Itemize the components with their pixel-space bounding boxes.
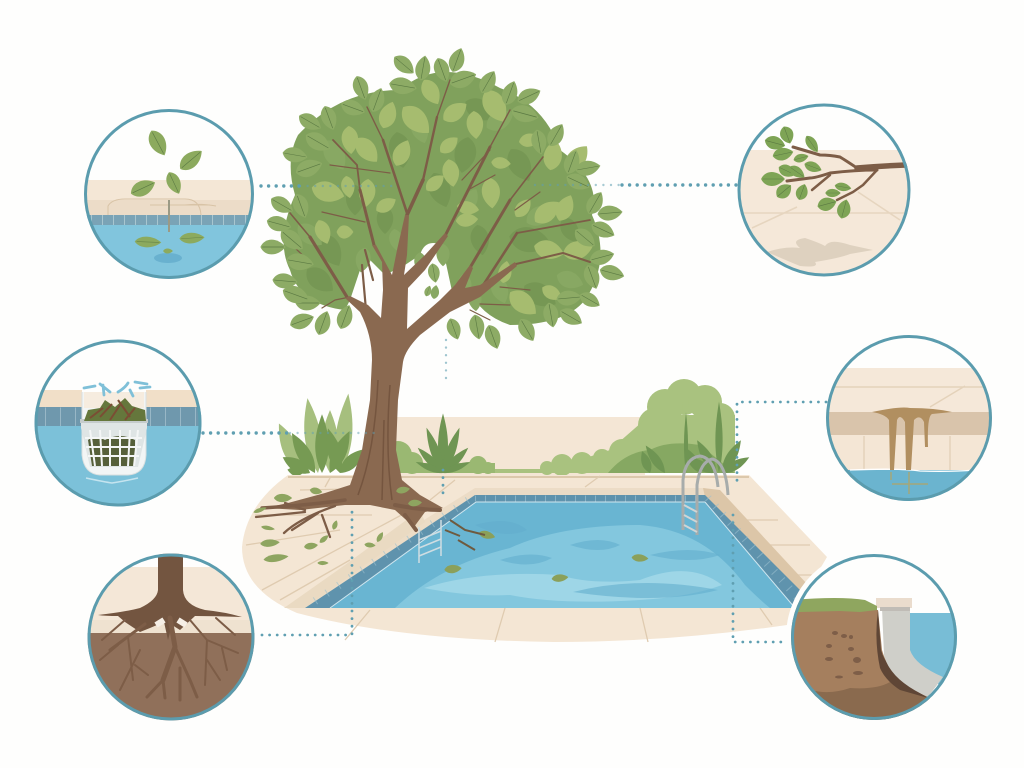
fallen leaves on deck [253, 486, 422, 565]
tree trunk and roots [98, 550, 242, 640]
tree [256, 46, 626, 537]
water [910, 613, 957, 686]
debris pile [84, 398, 146, 421]
garden shrubs [272, 379, 752, 478]
canopy highlight leaves [309, 76, 595, 321]
pool deck [242, 475, 827, 642]
swimming pool [305, 456, 803, 608]
concrete pool wall [882, 608, 943, 697]
canopy mid leaves [292, 104, 586, 312]
detail circle: skimmer basket clogged with debris [30, 340, 210, 511]
floating leaves [444, 529, 649, 583]
canopy shaded leaves [301, 93, 584, 313]
branch [787, 147, 906, 200]
water highlights [395, 525, 770, 608]
detail circle: invasive roots [85, 550, 260, 723]
stain drips [872, 408, 952, 470]
connector lines [203, 185, 826, 642]
coping [876, 598, 912, 608]
back garden wall [385, 417, 645, 475]
pool ladder right [683, 456, 728, 535]
tile band [305, 495, 803, 608]
detail circle: leaves falling into pool [80, 109, 260, 285]
trunk and main limbs [265, 215, 517, 527]
detail circle: soil and pool wall section [790, 554, 960, 730]
water [330, 502, 795, 608]
pool ladder left [419, 520, 441, 563]
detail circle: rust stain on coping [825, 335, 995, 504]
canopy mass [284, 72, 601, 325]
grass [790, 598, 877, 612]
branches [290, 80, 590, 320]
roots [256, 500, 440, 537]
white halo behind wall section circle [786, 549, 962, 725]
soil [791, 610, 930, 720]
outer leaves [260, 46, 626, 351]
water splash [84, 382, 150, 396]
basket [81, 421, 147, 467]
branch shadow [767, 238, 873, 266]
detail circle: overhanging branch [735, 104, 915, 280]
